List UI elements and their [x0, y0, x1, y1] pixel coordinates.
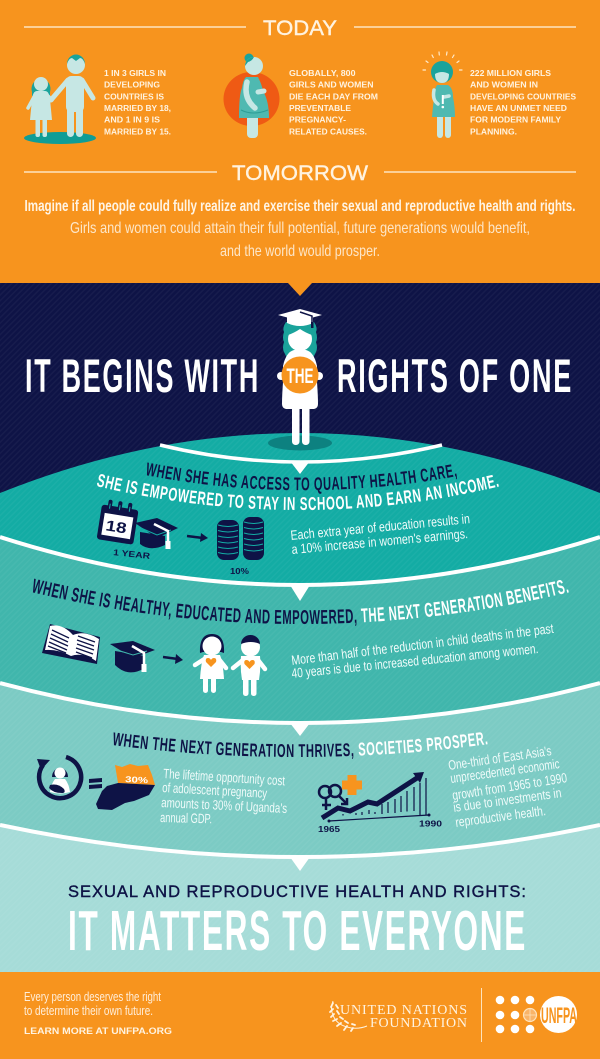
- text: footer message: [24, 990, 172, 1037]
- logo: UNFPA: [496, 996, 577, 1033]
- text: maternal death statistic: PREGNANCY-: [289, 115, 346, 125]
- text: East Asia fact: One-third of East Asia's: [447, 743, 553, 773]
- text: Uganda fact: The lifetime opportunity cost: [163, 766, 286, 788]
- text: child marriage statistic: MARRIED BY 18,: [104, 103, 171, 113]
- divider: [480, 988, 482, 1042]
- text: East Asia fact: reproductive health.: [454, 803, 547, 830]
- icon: girl with unmet need: [423, 52, 462, 138]
- logo: United Nations Foundation: FOUNDATION: [370, 1016, 467, 1031]
- text: family planning statistic: FOR MODERN FAMILY: [470, 115, 561, 125]
- text: child marriage statistic: MARRIED BY 15.: [104, 126, 171, 136]
- text: family planning statistic: 222 MILLION GIRLS: [470, 68, 551, 78]
- panel: closing message: [68, 882, 527, 963]
- icon: coin stacks: [217, 517, 264, 560]
- panel: education section: [97, 462, 499, 576]
- text: East Asia fact: unprecedented economic: [449, 756, 561, 786]
- text: family planning statistic: AND WOMEN IN: [470, 80, 538, 90]
- icon: pregnant woman: [224, 54, 280, 138]
- panel: closing band background: [0, 800, 600, 973]
- icon: graduation cap: [135, 518, 178, 549]
- icon: map of Uganda: [96, 764, 155, 810]
- label: 1 year: 1 YEAR: [113, 547, 151, 561]
- heading: quality health care: WHEN SHE HAS ACCESS TO QUALITY HEALTH CARE,: [146, 462, 457, 494]
- text: child marriage statistic: [104, 68, 171, 136]
- label: 1990: 1990: [419, 818, 442, 828]
- panel: footer: [0, 972, 600, 1059]
- arrow: [163, 654, 183, 664]
- text: maternal death statistic: RELATED CAUSES.: [289, 126, 367, 136]
- heading: societies prosper: WHEN THE NEXT GENERATION THRIVES, SOCIETIES PROSPER.: [114, 732, 488, 759]
- text: child marriage statistic: COUNTRIES IS: [104, 91, 164, 101]
- icon: cycle with mother and baby: [37, 757, 81, 798]
- icon: graduation cap: [110, 641, 155, 672]
- icon: equals sign: [89, 778, 102, 789]
- icon: child bride with older man: [24, 54, 96, 144]
- text: family planning statistic: HAVE AN UNMET NEED: [470, 103, 567, 113]
- heading: next generation benefits: WHEN SHE IS HEALTHY, EDUCATED AND EMPOWERED, THE NEXT GENERATION BENEFITS.: [32, 578, 569, 626]
- icon: healthy girl: [195, 634, 226, 693]
- text: Uganda fact: [160, 766, 288, 826]
- icon: calendar: [97, 500, 139, 545]
- heading: sexual and reproductive health and rights: SEXUAL AND REPRODUCTIVE HEALTH AND RIGHTS:: [68, 882, 527, 901]
- text: maternal death statistic: [289, 68, 378, 136]
- heading: today: TODAY: [263, 17, 337, 40]
- panel: next generation section: [32, 578, 569, 696]
- icon: graduate girl: THE: [286, 365, 314, 388]
- panel: next generation band background: [0, 520, 600, 736]
- text: earnings fact: a 10% increase in women's earnings.: [291, 526, 469, 557]
- text: maternal death statistic: PREVENTABLE: [289, 103, 351, 113]
- heading: tomorrow: TOMORROW: [232, 162, 368, 185]
- panel: societies band background: [0, 660, 600, 871]
- text: earnings fact: [290, 511, 470, 557]
- text: footer message: to determine their own future.: [24, 1004, 153, 1018]
- icon: graduate girl: [268, 309, 332, 450]
- logo: United Nations Foundation: [330, 1001, 467, 1031]
- icon: book: [42, 624, 100, 664]
- title: IT BEGINS WITH: [25, 349, 260, 402]
- text: East Asia fact: [447, 743, 568, 830]
- heading: quality health care: SHE IS EMPOWERED TO STAY IN SCHOOL AND EARN AN INCOME.: [97, 474, 499, 510]
- panel: navy title band: [0, 283, 600, 543]
- icon: healthy boy: [233, 635, 265, 696]
- text: child marriage statistic: AND 1 IN 9 IS: [104, 115, 160, 125]
- text: Uganda fact: of adolescent pregnancy: [162, 780, 268, 801]
- panel: societies section: [36, 732, 568, 834]
- text: child marriage statistic: 1 IN 3 GIRLS IN: [104, 68, 166, 78]
- icon: map of Uganda: 30%: [125, 774, 149, 785]
- text: child marriage statistic: DEVELOPING: [104, 80, 160, 90]
- text: earnings fact: Each extra year of education results in: [290, 511, 470, 543]
- panel: health care dome: [0, 433, 600, 601]
- label: 1965: 1965: [318, 824, 340, 834]
- panel: today and tomorrow: [0, 0, 600, 284]
- icon: calendar: 18: [104, 517, 128, 537]
- text: maternal death statistic: GLOBALLY, 800: [289, 68, 356, 78]
- text: footer message: LEARN MORE AT UNFPA.ORG: [24, 1026, 172, 1037]
- text: family planning statistic: PLANNING.: [470, 126, 517, 136]
- text: maternal death statistic: GIRLS AND WOMEN: [289, 80, 374, 90]
- logo: United Nations Foundation: UNITED NATIONS: [340, 1003, 467, 1018]
- text: family planning statistic: DEVELOPING COUNTRIES: [470, 91, 576, 101]
- text: East Asia fact: is due to investments in: [452, 785, 562, 815]
- text: Uganda fact: amounts to 30% of Uganda's: [161, 795, 288, 816]
- label: 10 percent: 10%: [230, 566, 249, 576]
- arrow: [187, 533, 208, 542]
- text: Uganda fact: annual GDP.: [160, 810, 212, 826]
- chart: economic growth line: [319, 772, 430, 822]
- text: maternal death statistic: DIE EACH DAY FROM: [289, 91, 378, 101]
- text: family planning statistic: [470, 68, 576, 136]
- text: tomorrow vision: and the world would prosper.: [220, 243, 380, 260]
- text: tomorrow vision: [24, 198, 576, 260]
- text: footer message: Every person deserves the right: [24, 990, 161, 1004]
